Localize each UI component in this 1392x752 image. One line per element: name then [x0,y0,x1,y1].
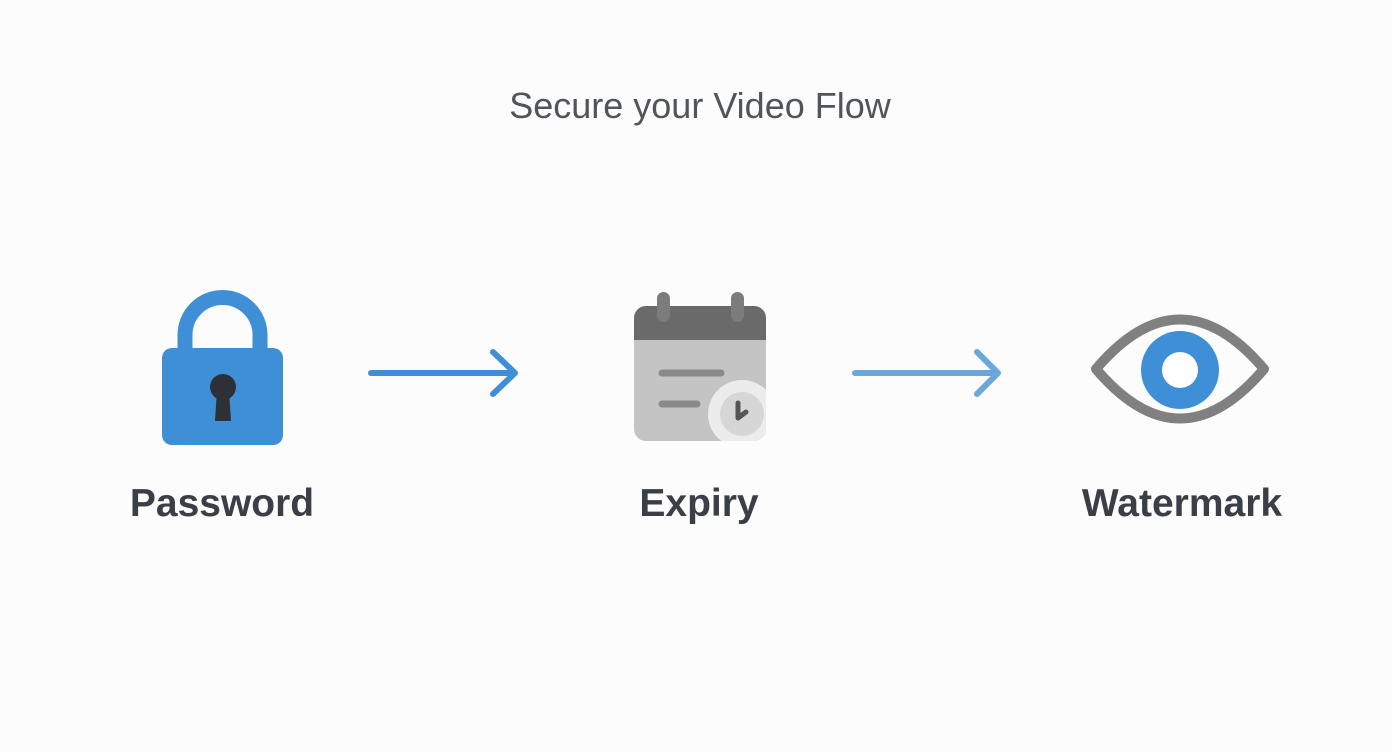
arrow: expiry to watermark [855,352,998,394]
label: Password: Password [130,482,314,525]
icon: eye [1096,320,1264,418]
icon: padlock [162,298,283,445]
diagram [162,290,1269,445]
arrow: password to expiry [371,352,515,394]
label: Expiry: Expiry [639,482,759,525]
title: Secure your Video Flow [509,85,891,126]
icon: calendar with clock [634,292,766,441]
label: Watermark: Watermark [1082,482,1282,525]
